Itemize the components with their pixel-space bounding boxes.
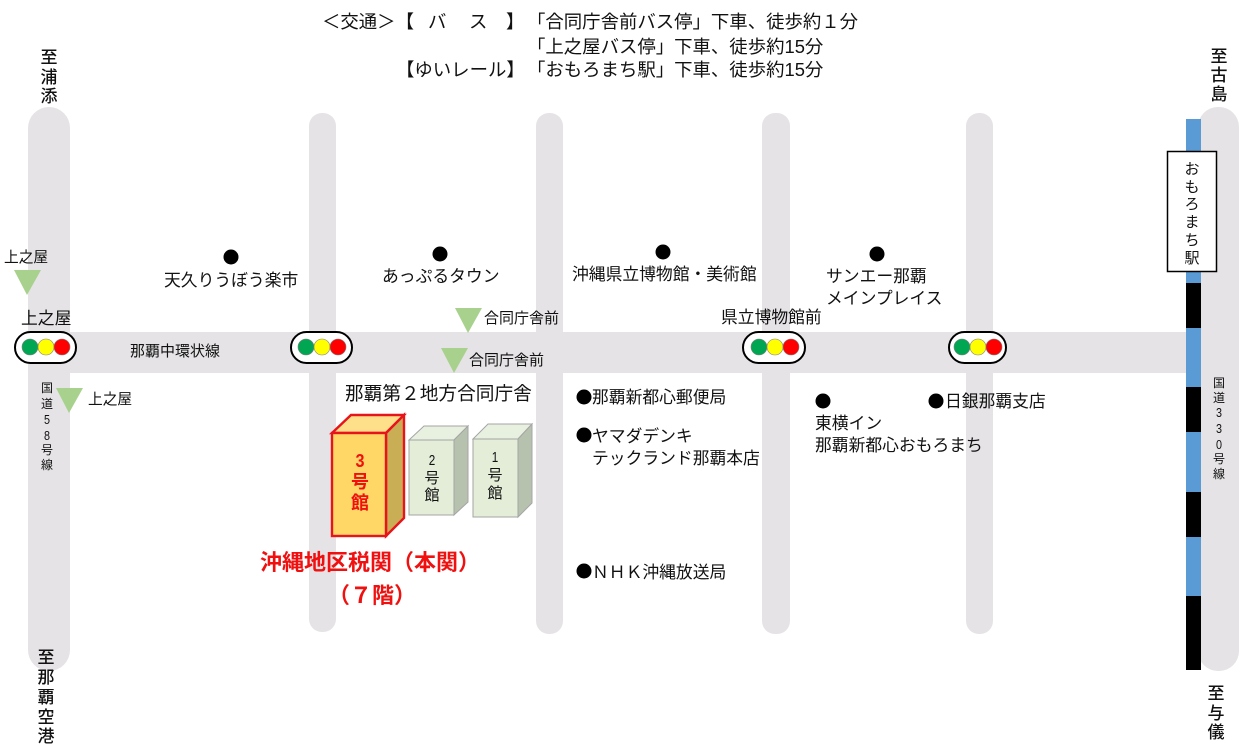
bus stop: Uenoya north: 上之屋 [4, 249, 48, 266]
bus stop: Godo-chosha-mae south [441, 348, 544, 373]
building 2: 館 [424, 487, 440, 504]
direction label: Yogi: 儀 [1208, 723, 1224, 742]
landmark: Apple Town: あっぷるタウン [382, 267, 499, 286]
traffic light 4 [949, 332, 1006, 363]
station: Omoromachi: も [1184, 179, 1200, 196]
access information [322, 11, 858, 80]
landmark: San-A Naha Main Place: メインプレイス [826, 289, 942, 308]
landmark: Toyoko Inn: 那覇新都心おもろまち [815, 436, 983, 455]
access information: 「合同庁舎前バス停」下車、徒歩約１分 [527, 11, 858, 32]
direction label: Yogi: 与 [1208, 704, 1224, 723]
road label: Naha ring road: 那覇中環状線 [130, 343, 220, 360]
building 3: 3 [356, 451, 364, 471]
access information: 【ゆいレール】 [396, 59, 525, 80]
road label: Route 58: 国 [41, 381, 53, 395]
direction label: Yogi [1208, 684, 1224, 742]
building 3: 号 [351, 472, 369, 492]
landmark: Okinawa Prefectural Museum [572, 244, 757, 284]
road label: Route 58: 道 [41, 397, 53, 411]
landmark: Tenku Ribou Rakuichi [164, 250, 298, 290]
direction label: Urasoe: 至 [40, 48, 58, 67]
bus stop: Godo-chosha-mae north: 合同庁舎前 [484, 310, 559, 327]
building 2: 号 [424, 470, 440, 487]
bus stop: Uenoya south: 上之屋 [88, 391, 132, 408]
landmark: Naha Shintoshin Post Office: 那覇新都心郵便局 [592, 388, 726, 407]
road label: Route 330: 号 [1213, 452, 1225, 466]
access information: 「上之屋バス停」下車、徒歩約15分 [527, 36, 823, 57]
building 2: 2 [429, 452, 435, 469]
monorail line [1186, 119, 1201, 670]
road label: Route 330: 0 [1216, 437, 1222, 452]
landmark: Yamada Denki: テックランド那覇本店 [592, 449, 760, 468]
bus stop: Uenoya north [4, 249, 48, 295]
station: Omoromachi: お [1184, 161, 1200, 178]
direction label: Yogi: 至 [1208, 684, 1224, 703]
direction label: Urasoe [40, 48, 58, 106]
building 1: 館 [487, 485, 503, 502]
road label: Route 330: 線 [1213, 466, 1225, 481]
road label: Route 330 [1213, 376, 1225, 481]
traffic light 1 [15, 332, 76, 363]
bus stop: Uenoya south [56, 388, 132, 413]
access information: 「おもろまち駅」下車、徒歩約15分 [527, 59, 823, 80]
building 1: 号 [487, 467, 503, 484]
landmark: San-A Naha Main Place: サンエー那覇 [826, 267, 927, 286]
landmark: Toyoko Inn [815, 394, 983, 455]
access information: バ [428, 11, 446, 32]
building 3 [332, 415, 404, 536]
intersection label: Uenoya: 上之屋 [21, 309, 71, 328]
intersection label: Prefectural Museum: 県立博物館前 [721, 308, 822, 327]
direction label: Naha Airport: 那 [38, 668, 54, 687]
station: Omoromachi: ち [1184, 232, 1200, 249]
road label: Route 330: 国 [1213, 376, 1225, 390]
station: Omoromachi: 駅 [1184, 250, 1200, 267]
landmark: Yamada Denki: ヤマダデンキ [592, 426, 693, 446]
direction label: Naha Airport: 空 [38, 708, 54, 727]
building 2 [409, 426, 468, 515]
station: Omoromachi: ろ [1184, 196, 1200, 213]
bus stop: Godo-chosha-mae north [455, 308, 559, 333]
traffic light 3 [743, 332, 805, 363]
road label: Route 330: 道 [1213, 391, 1225, 405]
access information: ＜交通＞【 [322, 11, 414, 32]
direction label: Furujima [1210, 47, 1228, 104]
direction label: Urasoe: 浦 [40, 68, 58, 87]
bus stop: Godo-chosha-mae south: 合同庁舎前 [469, 352, 544, 369]
direction label: Urasoe: 添 [40, 87, 58, 106]
landmark: Bank of Japan Naha Branch: 日銀那覇支店 [945, 392, 1046, 411]
landmark: Yamada Denki [576, 426, 760, 468]
road label: Route 330: 3 [1216, 405, 1222, 420]
road label: Route 58: 線 [41, 457, 53, 472]
road label: Route 330: 3 [1216, 421, 1222, 436]
direction label: Furujima: 島 [1210, 85, 1228, 104]
landmark: Toyoko Inn: 東横イン [815, 414, 882, 433]
customs office label: （７階） [328, 583, 416, 608]
access information: ス [469, 11, 487, 32]
road label: Route 58: 8 [44, 428, 50, 443]
customs office label: 沖縄地区税関（本関） [260, 550, 480, 575]
station: Omoromachi [1168, 152, 1216, 272]
building 1 [473, 424, 532, 517]
direction label: Furujima: 古 [1210, 66, 1228, 85]
traffic light 2 [291, 332, 352, 363]
road network [28, 107, 1239, 671]
government complex heading: 那覇第２地方合同庁舎 [345, 383, 532, 404]
landmark: Apple Town [382, 246, 499, 286]
station: Omoromachi: ま [1184, 214, 1200, 231]
landmark: Okinawa Prefectural Museum: 沖縄県立博物館・美術館 [572, 265, 757, 284]
road label: Route 58: 号 [41, 443, 53, 457]
building 1: 1 [492, 449, 498, 466]
landmark: San-A Naha Main Place [826, 246, 942, 308]
landmark: NHK Okinawa: ＮＨＫ沖縄放送局 [592, 563, 726, 582]
road label: Route 58: 5 [44, 412, 50, 427]
direction label: Naha Airport: 至 [38, 648, 54, 667]
direction label: Naha Airport [38, 648, 54, 746]
direction label: Naha Airport: 覇 [38, 688, 54, 707]
customs office label [260, 550, 480, 608]
building 3: 館 [351, 493, 369, 513]
road label: Route 58 [41, 381, 53, 472]
landmark: Tenku Ribou Rakuichi: 天久りうぼう楽市 [164, 271, 298, 290]
direction label: Furujima: 至 [1210, 47, 1228, 66]
access information: 】 [506, 11, 524, 32]
direction label: Naha Airport: 港 [38, 727, 54, 746]
